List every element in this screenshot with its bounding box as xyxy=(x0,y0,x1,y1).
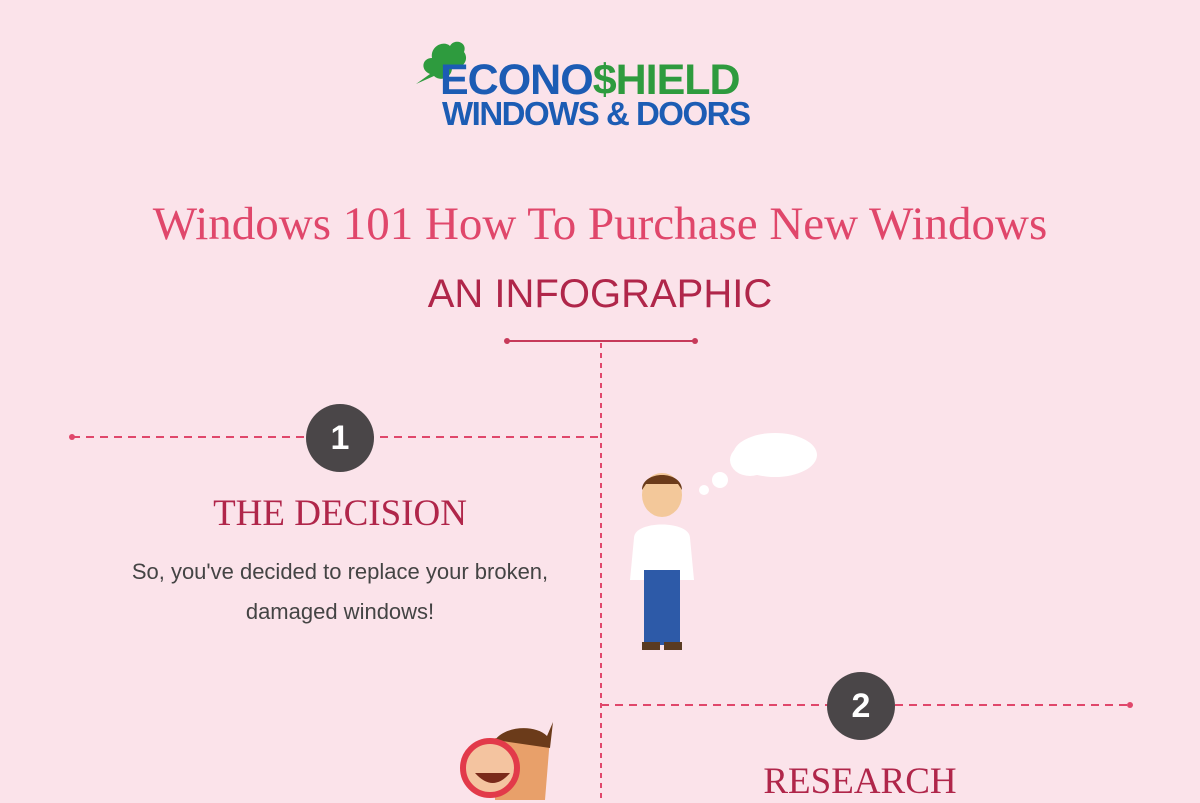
icon: leaf xyxy=(416,42,466,84)
title: Windows 101 How To Purchase New Windows xyxy=(153,198,1047,250)
step 2 badge: 2 xyxy=(852,687,870,725)
subtitle: AN INFOGRAPHIC xyxy=(428,272,772,316)
logo xyxy=(416,42,750,132)
step 1 text: So, you've decided to replace your broken, xyxy=(132,559,548,584)
icon: thinking man xyxy=(630,433,817,650)
step 2 heading: RESEARCH xyxy=(763,761,957,802)
logo: WINDOWS & DOORS xyxy=(442,95,749,132)
logo text: ECONO$HIELD xyxy=(440,56,740,104)
step 1 heading: THE DECISION xyxy=(213,493,467,534)
icon: man with magnifier xyxy=(460,722,553,800)
step 1 text: damaged windows! xyxy=(246,599,434,624)
step 2 badge xyxy=(827,672,895,740)
step 1 badge: 1 xyxy=(331,419,349,457)
step 1 badge xyxy=(306,404,374,472)
step 1 text xyxy=(132,559,548,624)
